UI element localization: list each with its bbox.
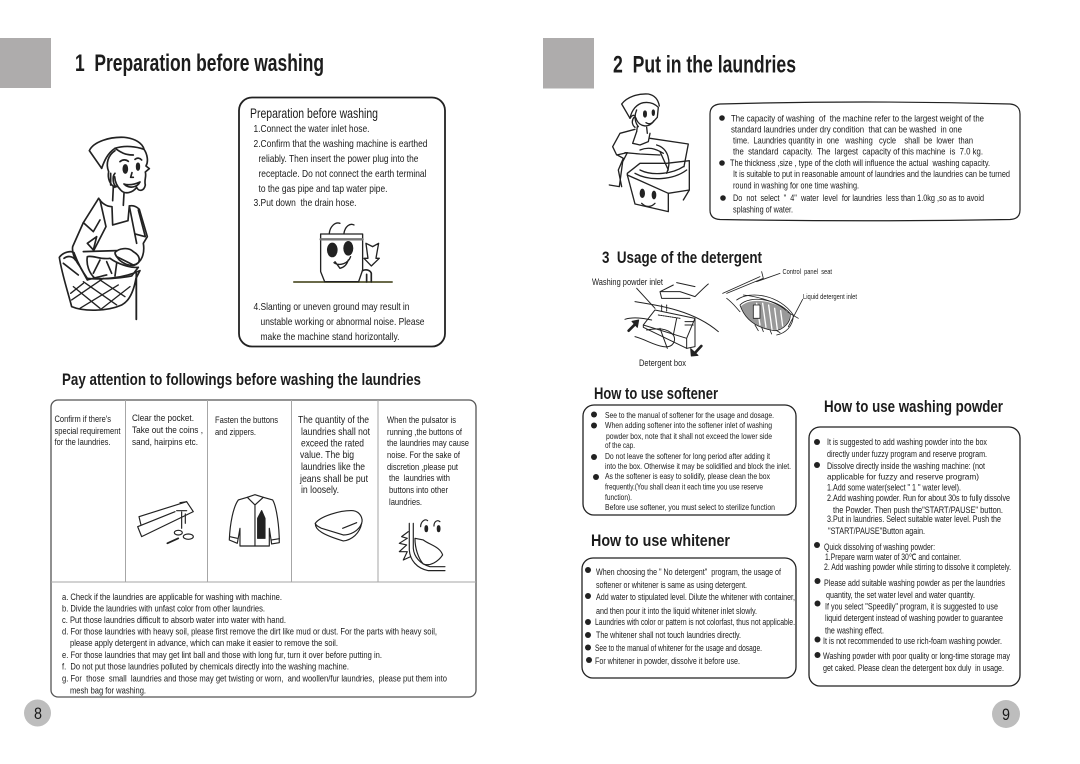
list: laundry notes a to g: please apply detergent in advance, which can make it easier to remove the soil. <box>70 638 338 649</box>
icon: shirt <box>229 495 279 546</box>
capacity text: Do not select " 4" water level for laundries less than 1.0kg ,so as to avoid <box>733 193 984 204</box>
capacity text: The thickness ,size , type of the cloth will influence the actual washing capacity. <box>730 158 990 169</box>
washing powder text: 3.Put in laundries. Select suitable water level. Push the <box>827 514 1001 524</box>
capacity text: the standard capacity. The largest capacity of this machine is 7.0 kg. <box>733 146 983 158</box>
column: pulsator: laundries. <box>389 497 422 508</box>
washing powder text: Dissolve directly inside the washing machine: (not <box>827 461 985 471</box>
steps one to three <box>254 123 428 209</box>
bullets <box>585 567 592 663</box>
bullets <box>591 412 599 480</box>
diagram: detergent box <box>592 267 858 369</box>
list: laundry notes a to g <box>62 592 447 696</box>
capacity text: standard laundries under dry condition that can be washed in one <box>731 124 962 136</box>
column: special requirement: Confirm if there's <box>54 414 111 425</box>
step four: 4.Slanting or uneven ground may result in <box>254 301 410 313</box>
whitener text <box>595 567 795 666</box>
washing powder text: the washing effect. <box>825 626 884 636</box>
washing powder text: Quick dissolving of washing powder: <box>824 542 935 552</box>
column: quantity: The quantity of the <box>298 414 369 426</box>
washing powder text <box>823 437 1011 673</box>
softener text: When adding softener into the softener inlet of washing <box>605 420 772 430</box>
whitener text: See to the manual of whitener for the usage and dosage. <box>595 643 762 653</box>
washing powder text: applicable for fuzzy and reserve program) <box>827 472 979 482</box>
softener text: function). <box>605 492 632 502</box>
steps one to three: to the gas pipe and tap water pipe. <box>258 183 388 195</box>
capacity text: round in washing for one time washing. <box>733 180 859 192</box>
washing powder text: If you select "Speedily" program, it is suggested to use <box>825 602 998 612</box>
column: pulsator: the laundries with <box>389 473 450 484</box>
column: quantity: jeans shall be put <box>299 473 368 485</box>
drawing: hand and drawer <box>625 283 718 356</box>
steps one to three: receptacle. Do not connect the earth terminal <box>258 168 426 180</box>
list: laundry notes a to g: g. For those small laundries and those may get twisting or worn, and woollen/fur laundries, please put them into <box>62 674 447 684</box>
title: preparation before washing: 1 Preparation before washing <box>75 50 324 77</box>
panel: capacity notes <box>710 102 1020 221</box>
column: pulsator: buttons into other <box>389 485 448 496</box>
column: quantity <box>298 414 370 496</box>
washing powder text: liquid detergent instead of washing powder to guarantee <box>825 613 1003 623</box>
washing powder text: 1.Prepare warm water of 30℃ and container. <box>825 552 961 562</box>
washing powder text: It is not recommended to use rich-foam washing powder. <box>823 636 1002 646</box>
column: special requirement <box>54 414 121 448</box>
column: pulsator: discretion ,please put <box>387 462 458 473</box>
column: quantity: laundries shall not <box>301 426 370 438</box>
whitener text: Laundries with color or pattern is not colorfast, thus not applicable. <box>595 617 795 627</box>
grey tab: page 8 <box>0 38 51 88</box>
capacity text: time. Laundries quantity in one washing cycle shall be lower than <box>733 136 973 146</box>
panel heading: Preparation before washing <box>250 105 378 121</box>
column: quantity: laundries like the <box>301 461 365 473</box>
page number 9: 9 <box>1002 705 1010 724</box>
washing powder text: directly under fuzzy program and reserve program. <box>827 449 987 459</box>
washing powder text: Washing powder with poor quality or long-time storage may <box>823 651 1010 661</box>
washing powder text: "START/PAUSE"Button again. <box>828 526 925 536</box>
panel: preparation steps <box>239 98 445 346</box>
icon: washing machine with drain hose <box>294 223 392 282</box>
column: clear the pocket: sand, hairpins etc. <box>132 437 198 448</box>
drawing: liquid detergent inlet <box>723 272 803 335</box>
grey tab: page 9 <box>543 38 594 88</box>
steps one to three: 3.Put down the drain hose. <box>254 197 356 209</box>
page number 9 <box>992 700 1020 728</box>
panel: laundry checklist table <box>51 400 476 697</box>
whitener text: Add water to stipulated level. Dilute the whitener with container, <box>596 592 795 602</box>
washing powder text: 2.Add washing powder. Run for about 30s to fully dissolve <box>827 493 1010 503</box>
column: special requirement: special requirement <box>54 426 121 437</box>
label: detergent box: Detergent box <box>639 358 686 369</box>
softener text: Do not leave the softener for long period after adding it <box>605 451 771 461</box>
washing powder text: the Powder. Then push the"START/PAUSE" button. <box>833 505 1003 515</box>
label: control panel seat: Control panel seat <box>782 267 833 276</box>
steps one to three: reliably. Then insert the power plug into the <box>258 153 419 165</box>
list: laundry notes a to g: e. For those laundries that may get lint ball and those with long fur, turn it over before putting in. <box>62 650 382 661</box>
softener text: Before use softener, you must select to sterilize function <box>605 502 775 512</box>
step four: unstable working or abnormal noise. Please <box>260 316 425 328</box>
capacity text <box>730 114 1010 216</box>
column: pulsator: the laundries may cause <box>387 438 469 449</box>
list: laundry notes a to g: mesh bag for washing. <box>70 686 146 696</box>
softener text <box>605 410 791 512</box>
bullets <box>719 115 726 201</box>
page number 8: 8 <box>34 704 42 723</box>
column: quantity: in loosely. <box>301 484 339 496</box>
washing powder text: 1.Add some water(select " 1 " water level). <box>827 482 961 492</box>
column: fasten buttons <box>215 415 278 438</box>
label: washing powder inlet: Washing powder inlet <box>592 277 663 288</box>
list: laundry notes a to g: a. Check if the laundries are applicable for washing with machine. <box>62 592 282 603</box>
softener text: into the box. Otherwise it may be solidified and block the inlet. <box>605 461 791 471</box>
whitener text: For whitener in powder, dissolve it before use. <box>595 656 740 666</box>
washing powder text: Please add suitable washing powder as per the laundries <box>824 578 1005 588</box>
column: clear the pocket: Take out the coins , <box>132 425 203 436</box>
washing powder text: It is suggested to add washing powder into the box <box>827 437 987 447</box>
softener text: powder box, note that it shall not exceed the lower side <box>606 431 772 441</box>
panel: whitener notes <box>582 558 796 678</box>
softener text: frequently.(You shall clean it each time you use reserve <box>605 482 763 492</box>
list: laundry notes a to g: b. Divide the laundries with unfast color from other laundries. <box>62 604 265 614</box>
softener text: of the cap. <box>605 440 635 450</box>
softener text: See to the manual of softener for the usage and dosage. <box>605 410 774 420</box>
step four <box>254 301 425 343</box>
washing powder text: get caked. Please clean the detergent box duly in usage. <box>823 663 1004 673</box>
label: liquid detergent inlet: Liquid detergent inlet <box>803 292 858 301</box>
washing powder text: quantity, the set water level and water quantity. <box>826 590 975 600</box>
bullets <box>814 439 820 658</box>
icon: noisy button in drum <box>399 520 445 571</box>
column: clear the pocket: Clear the pocket. <box>132 413 194 424</box>
column: special requirement: for the laundries. <box>54 437 110 448</box>
panel: washing powder notes <box>809 427 1020 686</box>
whitener text: and then pour it into the liquid whitener inlet slowly. <box>596 606 757 616</box>
capacity text: splashing of water. <box>733 204 793 216</box>
page number 8 <box>24 700 51 726</box>
column: pulsator: noise. For the sake of <box>387 450 460 461</box>
list: laundry notes a to g: d. For those laundries with heavy soil, please first remove the dirt like mud or dust. For the parts with heavy soil, <box>62 626 437 638</box>
column: fasten buttons: and zippers. <box>215 427 256 438</box>
heading: how to use washing powder: How to use washing powder <box>824 398 1003 416</box>
whitener text: The whitener shall not touch laundries directly. <box>596 630 741 640</box>
column: quantity: value. The big <box>300 449 354 461</box>
heading: how to use softener: How to use softener <box>594 384 718 403</box>
icon: folded clothes <box>315 511 362 541</box>
whitener text: softener or whitener is same as using detergent. <box>596 580 747 590</box>
whitener text: When choosing the " No detergent" program, the usage of <box>596 567 781 577</box>
column: pulsator <box>387 415 469 508</box>
list: laundry notes a to g: c. Put those laundries difficult to absorb water into water with hand. <box>62 615 286 626</box>
softener text: As the softener is easy to solidify, please clean the box <box>605 471 771 481</box>
column: clear the pocket <box>132 413 203 448</box>
column: quantity: exceed the rated <box>301 438 364 450</box>
title: put in the laundries: 2 Put in the laundries <box>613 52 796 78</box>
panel: softener notes <box>583 405 796 515</box>
steps one to three: 1.Connect the water inlet hose. <box>254 123 370 135</box>
column: pulsator: running ,the buttons of <box>387 427 462 438</box>
heading: pay attention: Pay attention to followings before washing the laundries <box>62 371 421 389</box>
capacity text: The capacity of washing of the machine refer to the largest weight of the <box>731 114 984 124</box>
heading: how to use whitener: How to use whitener <box>591 531 730 550</box>
icon: woman loading washing machine <box>609 94 689 212</box>
steps one to three: 2.Confirm that the washing machine is earthed <box>254 138 428 150</box>
column: fasten buttons: Fasten the buttons <box>215 415 278 426</box>
icon: woman with laundry basket <box>59 137 149 319</box>
icon: pocket items <box>138 502 193 543</box>
column: pulsator: When the pulsator is <box>387 415 456 426</box>
heading: usage of the detergent: 3 Usage of the detergent <box>602 249 762 267</box>
list: laundry notes a to g: f. Do not put those laundries polluted by chemicals directly into the washing machine. <box>62 662 349 672</box>
step four: make the machine stand horizontally. <box>260 331 400 343</box>
washing powder text: 2. Add washing powder while stirring to dissolve it completely. <box>824 562 1011 572</box>
